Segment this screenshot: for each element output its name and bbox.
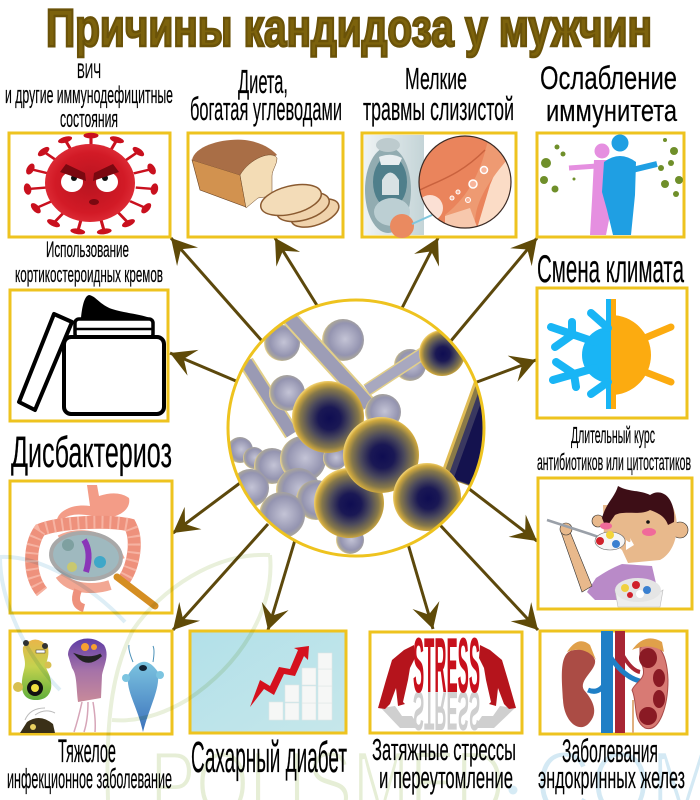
icon: green germ <box>13 640 52 700</box>
arrow: to dysbacteriosis <box>173 483 240 533</box>
label: diet: богатая углеводами <box>190 91 342 127</box>
panel: HIV virus <box>9 133 170 237</box>
label: corticosteroid creams <box>15 237 163 287</box>
panel: cream jar <box>10 290 168 421</box>
icon: green viruses <box>540 138 683 197</box>
icon: half snowflake <box>551 299 611 409</box>
label: stress: и переутомление <box>379 760 513 795</box>
icon: red rising arrow <box>250 646 309 707</box>
panel: mucosa injuries <box>362 133 516 238</box>
label: long course of antibiotics <box>537 422 691 475</box>
watermark leaf <box>0 555 270 800</box>
icon: magnified lesion <box>417 135 515 235</box>
icon: pushing figures <box>378 645 516 709</box>
central circle: candida cells <box>227 300 499 556</box>
arrow: to HIV <box>171 238 262 341</box>
arrow: to stress <box>408 544 433 629</box>
label: severe infection <box>7 733 172 794</box>
arrow: to infection <box>173 524 268 630</box>
icon: jar with lid <box>19 295 164 414</box>
label: HIV <box>5 60 173 133</box>
arrow: to diabetes <box>268 540 295 630</box>
label: mucosa injuries: Мелкие <box>405 61 467 96</box>
icon: pink figure <box>569 144 612 235</box>
label: stress: Затяжные стрессы <box>372 732 516 767</box>
arrow: to endocrine <box>440 525 538 630</box>
icon: open mouth <box>364 135 432 238</box>
text: Сахарный диабет <box>191 733 347 782</box>
panel: dysbacteriosis <box>10 481 172 613</box>
label: corticosteroid creams: кортикостероидных кремов <box>15 262 163 287</box>
icon: dark germ <box>20 708 55 733</box>
panel: endocrine <box>540 631 687 734</box>
text: инфекционное заболевание <box>7 763 172 794</box>
arrow: to climate <box>477 360 536 382</box>
icon: vessels <box>588 631 645 733</box>
panel: diabetes <box>190 631 346 733</box>
label: endocrine <box>538 733 685 795</box>
arrow: to cream <box>170 353 236 381</box>
icon: blue figure <box>602 134 657 235</box>
label: HIV: состояния <box>60 106 118 133</box>
panel: diet bread <box>188 133 343 237</box>
icon: red virus <box>23 133 159 235</box>
icon: purple germ <box>68 638 107 732</box>
icon: left kidney <box>562 641 596 727</box>
icon: stress reflection <box>381 680 515 741</box>
arrow: to diet <box>275 238 318 307</box>
icon: magnifier <box>49 530 155 606</box>
label: HIV: и другие иммунодефицитные <box>5 82 173 109</box>
icon: blue germ <box>122 645 164 732</box>
icon: boy eating pills <box>547 486 688 607</box>
panel: weakened immunity <box>537 133 684 237</box>
panel: climate change <box>537 288 687 418</box>
icon: intestines <box>32 485 134 608</box>
label: diet: Диета, <box>238 63 288 100</box>
arrow: to mucosa injury <box>401 238 438 310</box>
label: mucosa injuries: травмы слизистой <box>363 91 514 127</box>
icon: sugar cubes <box>269 653 332 720</box>
panel: stress <box>370 621 522 741</box>
label: dysbacteriosis: Дисбактериоз <box>11 428 172 477</box>
icon: bread loaf <box>192 140 343 233</box>
icon: right kidney cross-section <box>632 638 668 729</box>
label: severe infection: Тяжелое <box>58 733 116 769</box>
panel: severe infection <box>10 631 172 734</box>
label: corticosteroid creams: Использование <box>46 237 129 262</box>
arrow: to antibiotics <box>468 488 537 541</box>
label: weakened immunity <box>540 60 678 128</box>
icon: half sun <box>611 299 671 409</box>
label: HIV: ВИЧ <box>77 60 101 83</box>
label: diet <box>190 63 342 127</box>
label: mucosa injuries <box>363 61 514 127</box>
label: stress <box>372 732 516 795</box>
arrow: to weakened immunity <box>450 238 537 342</box>
panel: antibiotics <box>538 478 692 609</box>
